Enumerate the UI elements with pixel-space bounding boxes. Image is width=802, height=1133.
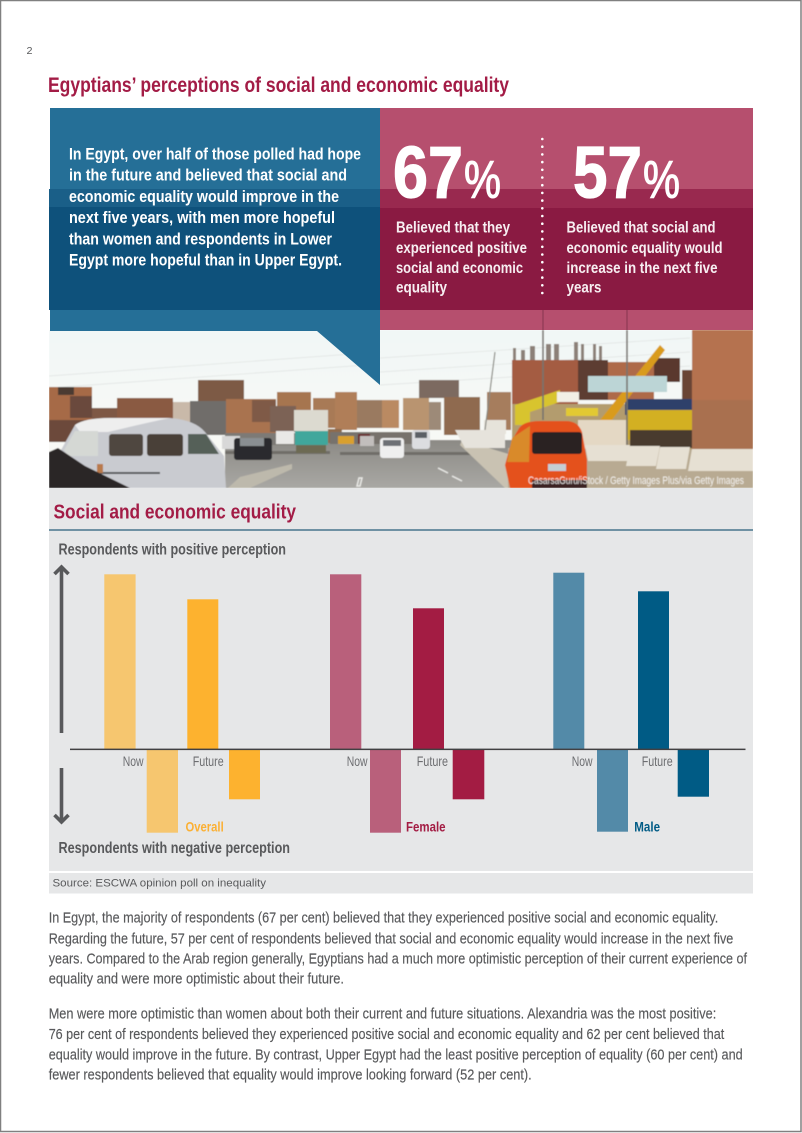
panel: chart (49, 488, 753, 894)
text block: first paragraph: In Egypt, the majority of respondents (67 per cent) believed that they experienced positive social and economic equality. (49, 911, 718, 927)
statistic description: current: social and economic (396, 260, 523, 277)
group: male: Now (572, 753, 593, 769)
group: overall: Future (193, 753, 224, 769)
orange minibus (505, 421, 587, 488)
bubble text: next five years, with men more hopeful (69, 209, 335, 227)
photo: Egyptian highway street scene (49, 330, 753, 488)
axis label: positive: Respondents with positive perception (58, 542, 286, 558)
group: female: Future (417, 753, 448, 769)
chart title: Social and economic equality (54, 501, 297, 523)
bubble text: in the future and believed that social and (69, 167, 347, 185)
bubble text: In Egypt, over half of those polled had hope (69, 146, 361, 164)
statistic description: future: increase in the next five (566, 260, 718, 277)
text block: second paragraph (49, 1007, 743, 1084)
group: overall: Now (123, 753, 144, 769)
statistic description: future (566, 220, 722, 296)
group: male: Future (642, 753, 673, 769)
group: male (553, 573, 709, 834)
text block: second paragraph: fewer respondents believed that equality would improve looking forward (52 per cent). (49, 1068, 532, 1084)
statistic: 57 per cent: 57 (573, 132, 642, 214)
group: overall (104, 574, 260, 834)
statistic description: future: Believed that social and (566, 220, 716, 237)
group: female (330, 574, 484, 834)
statistic: 67 per cent: % (464, 150, 501, 210)
white minibus (61, 418, 226, 488)
panel: statistics (380, 108, 753, 330)
source note: Source: ESCWA opinion poll on inequality (52, 878, 267, 890)
statistic: 67 per cent: 67 (393, 132, 463, 214)
text block: second paragraph: Men were more optimistic than women about both their current and future situations. Alexandria was the most positive: (49, 1007, 716, 1023)
truck in traffic (294, 410, 328, 453)
arrow: up (54, 567, 68, 733)
text block: first paragraph (49, 911, 748, 987)
group: overall: Overall (186, 818, 224, 834)
axis label: negative: Respondents with negative perception (58, 840, 290, 857)
dotted divider (541, 139, 544, 294)
group: female: Female (406, 818, 446, 834)
title: Egyptians’ perceptions of social and economic equality (48, 74, 509, 97)
text block: first paragraph: equality and were more optimistic about their future. (49, 971, 344, 987)
statistic description: current: Believed that they (396, 220, 510, 237)
statistic description: current: equality (396, 280, 447, 296)
statistic description: future: years (566, 280, 602, 296)
statistic description: current: experienced positive (396, 240, 527, 257)
panel: blue speech bubble (49, 108, 380, 385)
bubble text: economic equality would improve in the (69, 188, 339, 206)
statistic description: future: economic equality would (566, 240, 722, 257)
bubble text (69, 146, 361, 270)
page number: 2 (26, 46, 33, 57)
bar chart (70, 573, 746, 834)
statistic description: current (396, 220, 527, 296)
group: female: Now (347, 753, 368, 769)
bubble text: than women and respondents in Lower (69, 230, 333, 248)
arrow: down (54, 768, 68, 822)
bubble text: Egypt more hopeful than in Upper Egypt. (69, 252, 342, 270)
group: male: Male (634, 818, 660, 834)
statistic: 57 per cent: % (643, 150, 680, 210)
